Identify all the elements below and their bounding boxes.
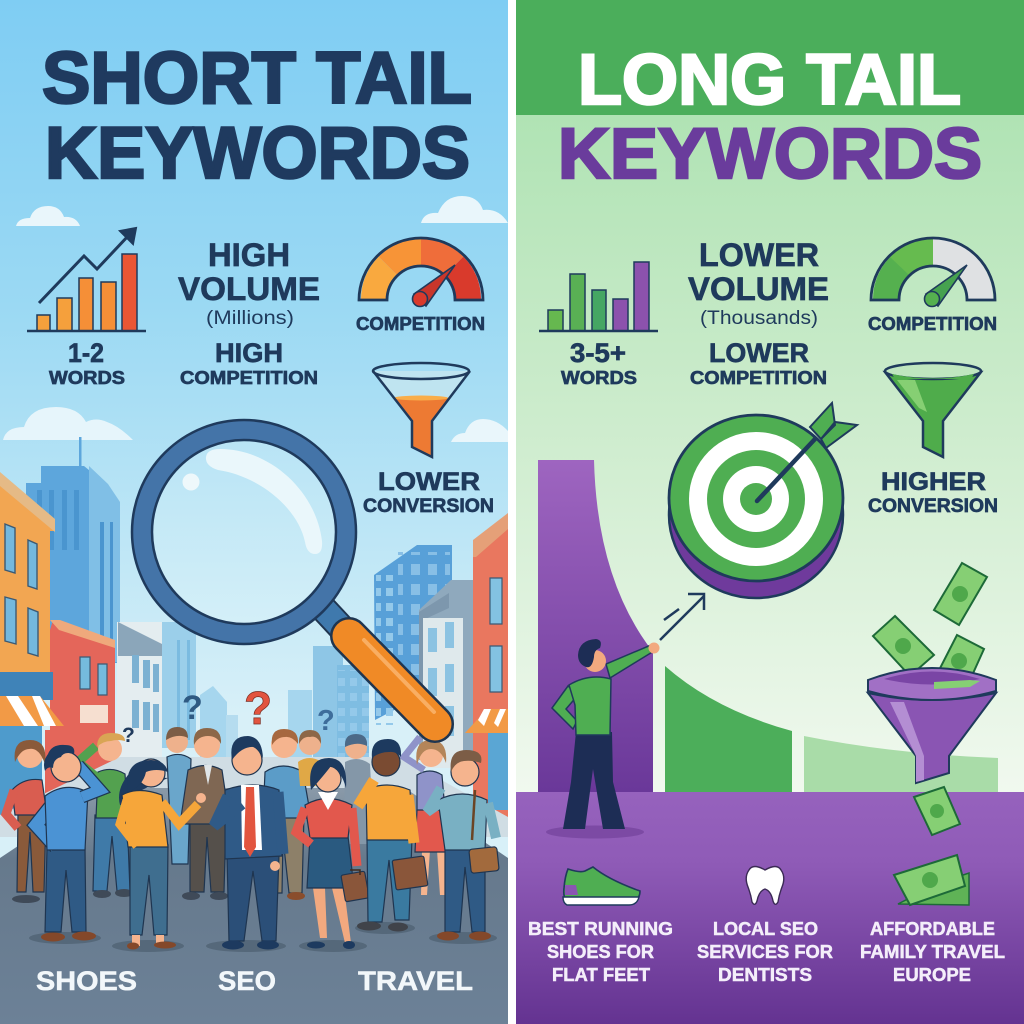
stat: high volume xyxy=(178,237,320,329)
header band xyxy=(516,0,1024,115)
stat: high competition: COMPETITION xyxy=(180,368,318,388)
stat: lower volume: (Thousands) xyxy=(700,308,818,329)
person: yellow sweater man xyxy=(355,739,428,934)
panel: long tail keywords xyxy=(516,0,1024,1024)
title: KEYWORDS xyxy=(45,113,470,194)
question marks: ? xyxy=(182,689,203,727)
question marks xyxy=(122,682,335,747)
stat: 1-2 words: 1-2 xyxy=(68,338,104,368)
clouds xyxy=(3,196,508,442)
person: back row man in light blue xyxy=(166,727,191,864)
crowd of confused people xyxy=(6,727,499,952)
panel: short tail keywords xyxy=(0,0,508,1024)
person: shirt man with satchel xyxy=(427,750,499,944)
label: competition: COMPETITION xyxy=(868,314,997,334)
bill xyxy=(934,563,987,625)
stat: lower competition: COMPETITION xyxy=(690,368,827,388)
title xyxy=(42,38,472,194)
example: best running shoes for flat feet: FLAT FEET xyxy=(552,965,650,985)
stat: high volume: VOLUME xyxy=(178,271,320,307)
title xyxy=(558,41,982,194)
icon: full green funnel xyxy=(885,363,981,457)
example: local seo services for dentists: DENTISTS xyxy=(718,965,812,985)
icon: briefcase xyxy=(341,870,369,902)
person pointing at target xyxy=(546,639,660,838)
stat: higher conversion: HIGHER xyxy=(881,468,986,496)
label: competition: COMPETITION xyxy=(356,314,485,334)
short tail examples: SHOES xyxy=(36,966,137,996)
stat: 1-2 words xyxy=(49,338,125,388)
example: best running shoes for flat feet xyxy=(528,919,673,985)
icon: leaky orange funnel xyxy=(373,363,470,457)
stat: high volume: (Millions) xyxy=(206,308,294,329)
title: KEYWORDS xyxy=(558,115,982,194)
person: blue sweater back man xyxy=(263,729,311,900)
example: local seo services for dentists xyxy=(697,919,833,985)
example: local seo services for dentists: SERVICES FOR xyxy=(697,942,833,962)
stat: 3-5+ words: 3-5+ xyxy=(570,338,626,368)
person: back row green sweater man xyxy=(78,733,133,898)
icon: briefcase xyxy=(392,856,428,890)
stat: lower conversion: LOWER xyxy=(378,468,480,496)
bill xyxy=(914,787,960,835)
example: best running shoes for flat feet: BEST RUNNING xyxy=(528,919,673,939)
stat: 3-5+ words xyxy=(561,338,637,388)
example: affordable family travel europe xyxy=(860,919,1005,985)
person: woman in purple and red dress xyxy=(404,737,448,895)
icon: running shoe xyxy=(563,867,640,905)
question marks: ? xyxy=(244,682,272,734)
person: gray sweater man xyxy=(344,734,374,844)
icon: money funnel xyxy=(868,563,996,835)
short tail examples: SEO xyxy=(218,966,276,996)
example: affordable family travel europe: FAMILY TRAVEL xyxy=(860,942,1005,962)
person: small woman in back xyxy=(298,730,324,786)
person: blue sweater man front xyxy=(29,745,101,944)
magnifying glass xyxy=(132,420,435,724)
stat: lower competition: LOWER xyxy=(709,338,809,368)
question marks: ? xyxy=(317,705,335,737)
example: best running shoes for flat feet: SHOES FOR xyxy=(547,942,654,962)
question marks: ? xyxy=(122,724,135,747)
bill xyxy=(873,616,934,676)
example: affordable family travel europe: EUROPE xyxy=(893,965,971,985)
stat: higher conversion: CONVERSION xyxy=(868,496,998,517)
person: orange top woman xyxy=(112,759,206,952)
person: suited man with tie xyxy=(206,736,286,952)
icon: tooth xyxy=(746,866,784,904)
stat: lower volume xyxy=(688,237,829,329)
title: SHORT TAIL xyxy=(42,38,472,119)
icon: rising bar chart xyxy=(27,228,146,331)
person: red top woman with briefcase xyxy=(296,758,369,952)
stat: higher conversion xyxy=(868,468,998,517)
stat: lower volume: LOWER xyxy=(699,237,819,273)
stat: high volume: HIGH xyxy=(208,237,290,273)
title: LONG TAIL xyxy=(578,41,961,120)
icon: red competition gauge xyxy=(359,238,483,306)
example: affordable family travel europe: AFFORDABLE xyxy=(870,919,995,939)
icon: bar chart xyxy=(539,262,658,331)
stat: high competition: HIGH xyxy=(215,338,283,368)
long tail curve chart xyxy=(538,460,998,792)
stat: lower competition xyxy=(690,338,827,388)
arrow: aim at target xyxy=(660,594,704,640)
stat: lower conversion xyxy=(363,468,494,517)
icon: cash stack xyxy=(894,855,969,905)
person: brown jacket man xyxy=(180,728,230,900)
floor xyxy=(516,792,1024,1024)
example: local seo services for dentists: LOCAL SEO xyxy=(713,919,818,939)
stat: 3-5+ words: WORDS xyxy=(561,368,637,388)
short tail examples xyxy=(36,966,473,996)
icon: green competition gauge xyxy=(871,238,995,306)
person: back row woman in red xyxy=(6,740,47,903)
stat: high competition xyxy=(180,338,318,388)
city buildings xyxy=(0,437,508,837)
short tail examples: TRAVEL xyxy=(358,966,473,996)
stat: lower volume: VOLUME xyxy=(688,271,829,307)
stat: lower conversion: CONVERSION xyxy=(363,496,494,517)
road xyxy=(0,788,508,1024)
icon: bullseye target with arrow xyxy=(669,403,857,598)
icon: satchel xyxy=(469,847,499,873)
bill xyxy=(934,635,984,680)
stat: 1-2 words: WORDS xyxy=(49,368,125,388)
